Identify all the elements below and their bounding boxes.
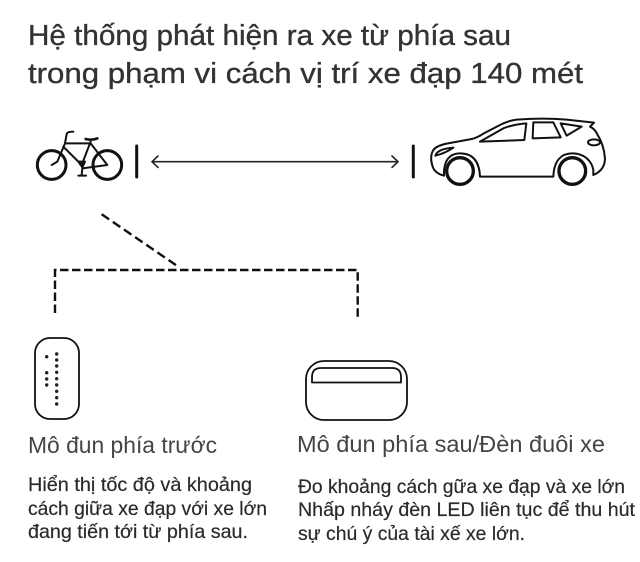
text: front module description: cách giữa xe đạp với xe lớn <box>28 498 267 520</box>
text: rear module description: Đo khoảng cách gữa xe đạp và xe lớn <box>298 476 625 498</box>
text: front module description: Hiển thị tốc độ và khoảng <box>28 474 252 496</box>
icon: car <box>431 119 605 184</box>
text: rear module description <box>298 476 636 545</box>
heading: rear module: Mô đun phía sau/Đèn đuôi xe <box>297 431 605 457</box>
text: rear module description: sự chú ý của tài xế xe lớn. <box>298 523 525 545</box>
icon: rear module <box>306 361 407 420</box>
icon: bicycle <box>37 132 122 179</box>
distance arrow <box>152 156 398 167</box>
text: front module description <box>28 474 267 543</box>
icon: front module <box>35 338 79 419</box>
right distance marker <box>412 146 415 177</box>
title: trong phạm vi cách vị trí xe đạp 140 mét <box>28 58 583 90</box>
text: rear module description: Nhấp nháy đèn LED liên tục để thu hút <box>298 499 636 521</box>
heading: front module: Mô đun phía trước <box>28 432 217 458</box>
text: front module description: đang tiến tới từ phía sau. <box>28 521 248 543</box>
title <box>28 20 583 90</box>
left distance marker <box>135 146 138 177</box>
title: Hệ thống phát hiện ra xe từ phía sau <box>28 20 511 52</box>
dashed connector <box>55 214 358 318</box>
